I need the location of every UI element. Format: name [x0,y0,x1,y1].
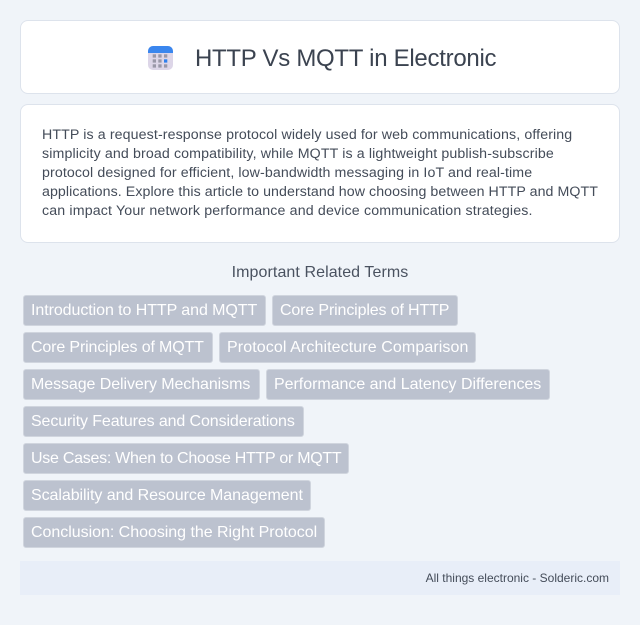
intro paragraph: protocol designed for efficient, low-bandwidth messaging in IoT and real-time [42,165,532,181]
tag [23,480,311,511]
intro paragraph: simplicity and broad compatibility, while MQTT is a lightweight publish-subscribe [42,146,554,162]
tag: Use Cases: When to Choose HTTP or MQTT [31,450,341,467]
section heading: Important Related Terms [232,264,408,281]
tag: Scalability and Resource Management [31,487,303,504]
icon: calendar [148,46,173,70]
tag list [23,295,550,548]
tag [219,332,476,363]
intro paragraph: can impact Your network performance and device communication strategies. [42,203,533,219]
tag [23,443,349,474]
tag: Conclusion: Choosing the Right Protocol [31,524,317,541]
tag [23,369,260,400]
tag: Protocol Architecture Comparison [227,339,469,356]
tag [266,369,550,400]
footer text: All things electronic - Solderic.com [426,571,609,585]
intro paragraph: HTTP is a request-response protocol widely used for web communications, offering [42,127,572,143]
tag [23,517,325,548]
tag: Core Principles of MQTT [31,339,204,356]
intro paragraph [42,127,598,219]
tag [23,295,266,326]
tag [272,295,458,326]
intro paragraph: applications. Explore this article to understand how choosing between HTTP and MQTT [42,184,598,200]
tag: Performance and Latency Differences [274,376,541,393]
tag: Core Principles of HTTP [280,302,449,319]
intro text panel [20,104,620,243]
tag: Message Delivery Mechanisms [31,376,250,393]
tag: Introduction to HTTP and MQTT [31,302,257,319]
tag: Security Features and Considerations [31,413,295,430]
header panel [20,20,620,94]
tag [23,332,213,363]
title: HTTP Vs MQTT in Electronic [195,45,496,72]
footer bar [20,561,620,595]
tag [23,406,304,437]
